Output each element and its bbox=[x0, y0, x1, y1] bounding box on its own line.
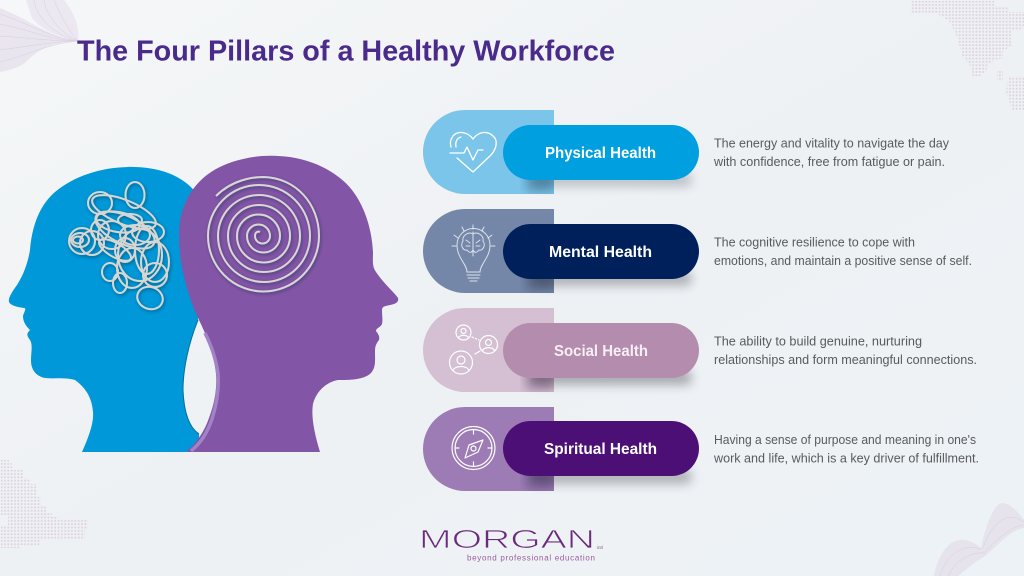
pill label: Mental Health bbox=[549, 244, 652, 261]
tab background bbox=[423, 407, 554, 491]
spiral bbox=[208, 177, 319, 292]
description: The ability to build genuine, nurturing bbox=[714, 334, 922, 348]
blue head shadow edge bbox=[183, 320, 199, 434]
pill: mental health bbox=[503, 224, 699, 279]
title: The Four Pillars of a Healthy Workforce bbox=[77, 36, 615, 68]
description: relationships and form meaningful connections. bbox=[714, 353, 977, 367]
decorative wave: bottom right bbox=[934, 503, 1024, 576]
logo tagline: beyond professional education bbox=[467, 554, 595, 562]
pill shadow bbox=[526, 466, 692, 489]
purple head silhouette bbox=[179, 156, 398, 452]
pill label: Social Health bbox=[554, 343, 648, 360]
purple head light edge bbox=[191, 333, 218, 451]
pill label: Spiritual Health bbox=[544, 441, 657, 458]
description: Having a sense of purpose and meaning in one's bbox=[714, 433, 976, 447]
pill label: Physical Health bbox=[545, 145, 656, 162]
pill: social health bbox=[503, 323, 699, 378]
icon: connected people bbox=[450, 325, 498, 374]
description bbox=[714, 236, 972, 268]
description: The cognitive resilience to cope with bbox=[714, 236, 915, 250]
logo wordmark: MORGAN bbox=[419, 524, 595, 554]
description bbox=[713, 433, 979, 466]
pillar row: spiritual health bbox=[423, 407, 979, 491]
decorative dot map: top right bbox=[911, 1, 1024, 76]
tab background bbox=[423, 209, 554, 293]
pillar row: physical health bbox=[423, 110, 950, 194]
tangled wire bbox=[69, 182, 169, 313]
pill shadow bbox=[526, 368, 692, 390]
decorative dot map: right edge bbox=[997, 70, 1024, 110]
tab background bbox=[423, 110, 554, 194]
logo: morgan bbox=[419, 524, 603, 562]
description: work and life, which is a key driver of fulfillment. bbox=[713, 452, 979, 466]
pillar row: social health bbox=[423, 308, 977, 392]
pill shadow bbox=[526, 269, 692, 291]
tab background bbox=[423, 308, 554, 392]
pill: spiritual health bbox=[503, 421, 699, 476]
icon: lightbulb with brain bbox=[452, 225, 495, 281]
description bbox=[714, 334, 977, 367]
icon: heart with pulse bbox=[450, 132, 496, 172]
decorative dot map: bottom left bbox=[1, 460, 88, 548]
pill: physical health bbox=[503, 125, 699, 180]
blue head silhouette bbox=[9, 167, 200, 452]
logo suffix: intl bbox=[597, 545, 603, 550]
pill shadow bbox=[526, 170, 692, 192]
description bbox=[713, 136, 950, 169]
description: emotions, and maintain a positive sense of self. bbox=[714, 254, 972, 268]
icon: compass bbox=[452, 426, 495, 470]
pillar row: mental health bbox=[423, 209, 972, 293]
description: with confidence, free from fatigue or pain. bbox=[713, 155, 945, 169]
description: The energy and vitality to navigate the day bbox=[714, 136, 950, 150]
illustration: two heads bbox=[9, 156, 398, 452]
decorative wave: top left bbox=[0, 0, 78, 72]
